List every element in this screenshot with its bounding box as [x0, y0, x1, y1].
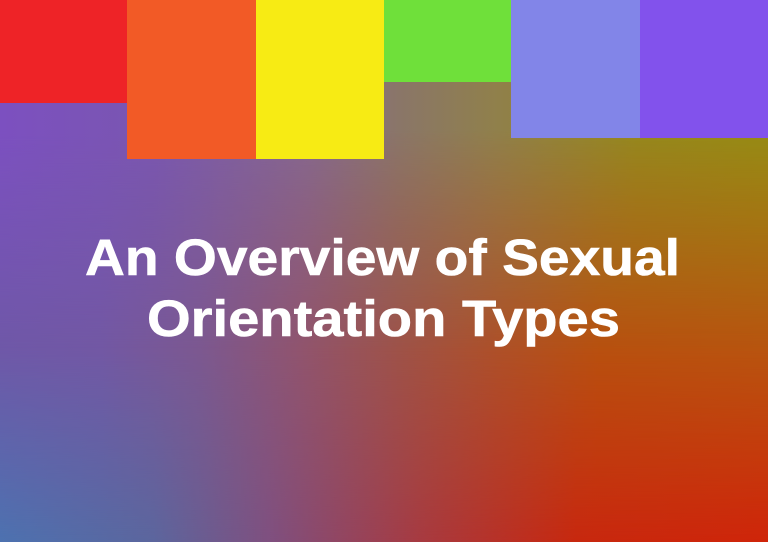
bar: red — [0, 0, 128, 103]
bar: periwinkle — [511, 0, 640, 138]
bar: yellow — [256, 0, 384, 159]
bar: orange — [127, 0, 256, 159]
bar: violet — [640, 0, 768, 138]
title: Orientation Types — [147, 290, 620, 347]
bar: green — [384, 0, 511, 82]
title: An Overview of Sexual — [85, 229, 680, 286]
